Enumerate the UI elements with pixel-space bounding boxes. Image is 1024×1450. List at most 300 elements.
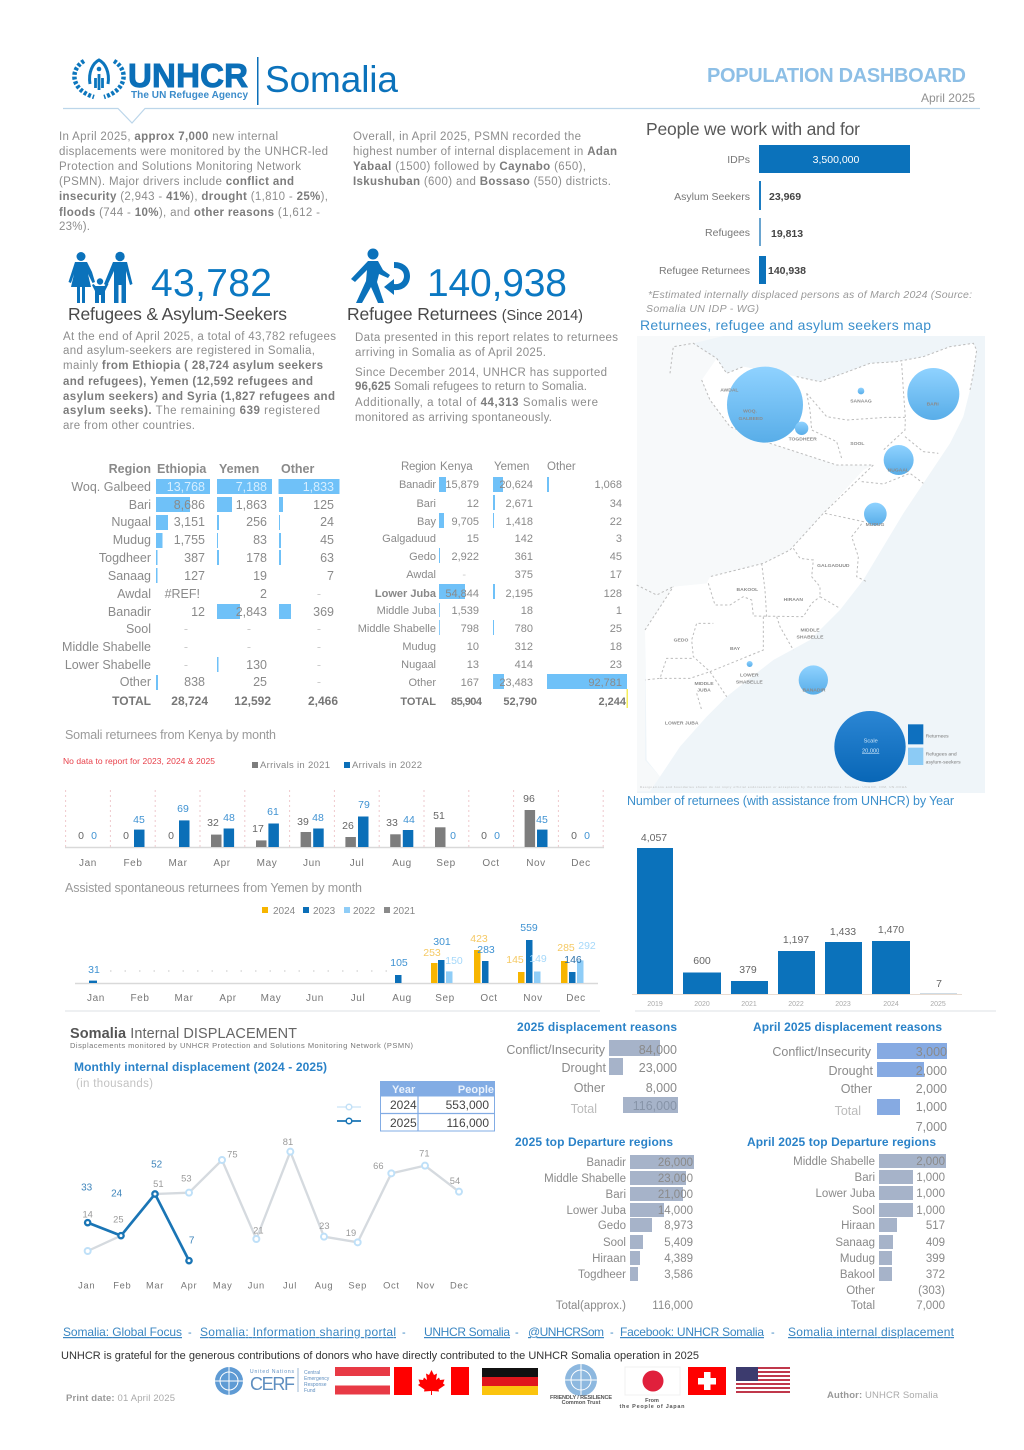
region labels: Mudug xyxy=(113,533,151,547)
labels and values: Total xyxy=(851,1300,875,1312)
month axis: Jan xyxy=(79,858,97,869)
map legend: Returnees xyxy=(926,733,949,739)
value labels: 0 xyxy=(494,830,500,842)
Kenya values: 9,705 xyxy=(451,516,479,528)
region labels: Banadir xyxy=(108,605,151,619)
region labels: HIRAAN xyxy=(784,597,803,603)
2024 value labels: 75 xyxy=(227,1150,238,1160)
other values: 45 xyxy=(320,533,334,547)
other values: 25 xyxy=(610,623,622,635)
labels and values: Middle Shabelle xyxy=(544,1173,626,1185)
panel: 2025 displacement reasons xyxy=(506,1020,678,1116)
value labels xyxy=(78,793,590,842)
Ethiopia values: 28,724 xyxy=(171,694,208,708)
section divider xyxy=(65,1010,996,1012)
labels and values: Other xyxy=(846,1285,875,1297)
Yemen values: 780 xyxy=(515,623,533,635)
Yemen values: 2,843 xyxy=(236,605,267,619)
value labels: 26 xyxy=(342,820,354,832)
Kenya values: 1,539 xyxy=(451,605,479,617)
Yemen values: 23,483 xyxy=(499,677,533,689)
year axis: 2025 xyxy=(930,1001,946,1008)
month axis: Sep xyxy=(436,858,456,869)
line chart: monthly internal displacement xyxy=(78,1137,469,1290)
Yemen values: 52,790 xyxy=(503,696,537,708)
table header xyxy=(401,461,576,473)
other values xyxy=(588,479,627,708)
labels and values: Lower Juba xyxy=(816,1188,876,1200)
year axis: 2022 xyxy=(788,1001,804,1008)
bar: asylum seekers: Asylum Seekers xyxy=(674,191,750,203)
table header: Other xyxy=(281,462,314,476)
month axis xyxy=(87,993,586,1004)
month axis: Jan xyxy=(87,993,105,1004)
month axis: Nov xyxy=(416,1280,435,1290)
Kenya values xyxy=(445,479,483,708)
month axis: Mar xyxy=(146,1280,164,1290)
value labels: 32 xyxy=(207,817,219,829)
Ethiopia values: 838 xyxy=(184,675,205,689)
icon: CERF logo: Emergency xyxy=(304,1376,330,1382)
region labels: WOQ. xyxy=(743,409,758,415)
section heading: Somalia internal displacement: Displacements monitored by UNHCR Protection and Solutions Monitoring Network (PSMN) xyxy=(70,1041,414,1050)
month axis: Jul xyxy=(283,1280,297,1290)
value labels xyxy=(641,832,942,990)
value labels: 39 xyxy=(297,816,309,828)
region labels: Nugaal xyxy=(111,515,151,529)
Yemen values: 178 xyxy=(246,551,267,565)
value labels: 150 xyxy=(445,955,463,967)
flag: Japan xyxy=(620,1367,685,1410)
footer links xyxy=(63,1325,955,1339)
other values: 17 xyxy=(610,569,622,581)
labels and values: 23,000 xyxy=(658,1173,693,1185)
region labels: Woq. Galbeed xyxy=(71,480,151,494)
chart title: Number of returnees (with assistance from UNHCR) by Year xyxy=(627,794,954,808)
month axis: Nov xyxy=(526,858,546,869)
region labels xyxy=(62,480,151,708)
text block: highest displacement districts xyxy=(353,131,617,188)
footer links: Somalia internal displacement xyxy=(788,1325,955,1339)
text block: returnees description: 96,625 Somali refugees to return to Somalia. xyxy=(355,381,587,393)
value labels xyxy=(88,922,596,976)
value labels: 45 xyxy=(536,814,548,826)
Ethiopia values: 127 xyxy=(184,569,205,583)
value labels: 31 xyxy=(88,964,100,976)
month axis: Mar xyxy=(174,993,194,1004)
value labels: 4,057 xyxy=(641,832,667,844)
value labels: 559 xyxy=(520,922,538,934)
labels and values: 1,000 xyxy=(916,1100,947,1114)
other values: 1,833 xyxy=(303,480,334,494)
month axis: Jul xyxy=(350,858,364,869)
region labels: Gedo xyxy=(409,551,436,563)
2024 value labels: 14 xyxy=(82,1209,93,1219)
2025 value labels: 33 xyxy=(81,1183,93,1194)
heading: refugees and asylum-seekers: Refugees & Asylum-Seekers xyxy=(68,304,287,324)
legend: Arrivals in 2022 xyxy=(352,760,422,771)
2025 line xyxy=(85,1191,192,1263)
text block: highest displacement districts: highest number of internal displacement in Adan xyxy=(353,146,617,158)
region labels: Middle Juba xyxy=(377,605,437,617)
year axis: 2023 xyxy=(835,1001,851,1008)
table: yearly totals: 553,000 xyxy=(446,1098,489,1112)
value labels: 0 xyxy=(571,830,577,842)
other values: - xyxy=(317,587,321,601)
labels and values: Total xyxy=(835,1104,861,1118)
icon: CERF logo: Fund xyxy=(304,1388,316,1394)
month axis: Dec xyxy=(566,993,586,1004)
table bars xyxy=(439,477,627,689)
icon: UN fund emblem: FRIENDLY / RESILIENCE xyxy=(550,1395,612,1401)
region labels: GALBEED xyxy=(738,416,763,422)
legend: 2024 xyxy=(273,906,296,917)
labels and values xyxy=(772,1045,947,1134)
icon: walking returnee with return arrow xyxy=(351,248,410,303)
labels and values: Gedo xyxy=(598,1220,626,1232)
other values: - xyxy=(317,640,321,654)
footer links: - xyxy=(188,1327,192,1339)
2024 value labels xyxy=(82,1137,460,1238)
Yemen values: - xyxy=(247,622,251,636)
labels and values: 1,000 xyxy=(916,1205,945,1217)
region labels: NUGAAL xyxy=(888,468,909,474)
region labels: TOTAL xyxy=(400,696,436,708)
labels and values: 26,000 xyxy=(658,1157,693,1169)
region labels xyxy=(665,388,939,726)
table header: Yemen xyxy=(494,461,529,473)
month axis: Oct xyxy=(480,993,498,1004)
region labels: Banadir xyxy=(399,479,436,491)
2024 value labels: 21 xyxy=(253,1225,264,1235)
labels and values: 14,000 xyxy=(658,1205,693,1217)
value labels: 600 xyxy=(693,955,711,967)
footnote: Somalia UN IDP - WG) xyxy=(646,303,759,315)
labels and values: 372 xyxy=(926,1269,945,1281)
region labels: Bay xyxy=(417,516,436,528)
text block: highest displacement districts: Yabaal (1500) followed by Caynabo (650), xyxy=(353,161,586,173)
Ethiopia values: - xyxy=(184,640,188,654)
bar: IDPs xyxy=(727,145,910,173)
region labels: LOWER JUBA xyxy=(665,720,699,726)
bars xyxy=(630,1155,694,1281)
value labels: 285 xyxy=(557,942,575,954)
region labels: JUBA xyxy=(697,688,711,694)
region labels: TOTAL xyxy=(112,694,151,708)
section heading: Somalia internal displacement: Somalia Internal DISPLACEMENT xyxy=(70,1026,297,1042)
bars xyxy=(431,950,568,983)
labels and values: Total(approx.) xyxy=(556,1300,626,1312)
2024 value labels: 66 xyxy=(373,1161,384,1171)
2025 value labels xyxy=(81,1159,195,1246)
region labels: BAY xyxy=(730,646,741,652)
value labels: 301 xyxy=(433,936,451,948)
month axis: Jun xyxy=(303,858,321,869)
print date: Print date: 01 April 2025 xyxy=(66,1393,175,1404)
bar: IDPs: IDPs xyxy=(727,154,750,166)
scale circle: 20,000 xyxy=(862,748,879,754)
text block: returnees description xyxy=(355,332,618,424)
footer links: Somalia: Information sharing portal xyxy=(200,1325,396,1339)
2024 value labels: 71 xyxy=(419,1149,430,1159)
month axis: Jun xyxy=(306,993,324,1004)
month axis: Feb xyxy=(113,1280,131,1290)
region labels: Galgaduud xyxy=(382,533,436,545)
footnote: *Estimated internally displaced persons as of March 2024 (Source: xyxy=(648,289,972,301)
Yemen values: 361 xyxy=(515,551,533,563)
country name: Somalia xyxy=(265,59,398,100)
month axis: Mar xyxy=(168,858,188,869)
value labels: 69 xyxy=(177,803,189,815)
Yemen values: 130 xyxy=(246,658,267,672)
Kenya values: 167 xyxy=(461,677,479,689)
panel: people we work with and for xyxy=(646,119,972,315)
labels and values: Sanaag xyxy=(835,1237,875,1249)
panel: 2025 top departure regions xyxy=(515,1135,694,1312)
legend xyxy=(262,906,416,917)
Yemen values: 2,195 xyxy=(505,588,533,600)
footer links: - xyxy=(402,1327,406,1339)
gridlines xyxy=(66,790,603,847)
labels and values: Bari xyxy=(606,1189,626,1201)
Ethiopia values: 13,768 xyxy=(167,480,205,494)
text block: refugees description: mainly from Ethiopia ( 28,724 asylum seekers xyxy=(63,360,323,372)
Yemen values: 7,188 xyxy=(236,480,267,494)
footer links: @UNHCRSom xyxy=(528,1325,604,1339)
icon: CERF logo: Response xyxy=(304,1382,327,1388)
text block: returnees description: arriving in Somalia as of April 2025. xyxy=(355,347,546,359)
value labels: 1,433 xyxy=(830,926,856,938)
region labels: SOOL xyxy=(850,441,864,447)
Kenya values: 15 xyxy=(467,533,479,545)
value labels: 44 xyxy=(403,814,415,826)
text block: displacement summary: insecurity (2,943 - 41%), drought (1,810 - 25%), xyxy=(59,191,328,203)
month axis: Sep xyxy=(435,993,455,1004)
value labels: 145 xyxy=(506,954,524,966)
month axis: Jun xyxy=(248,1280,265,1290)
value labels: 0 xyxy=(450,830,456,842)
heading: 2025 displacement reasons xyxy=(517,1020,677,1034)
Somalia land and regional borders xyxy=(637,336,977,791)
labels and values: Drought xyxy=(829,1064,874,1078)
Yemen values: 375 xyxy=(515,569,533,581)
line chart legend xyxy=(337,1104,361,1124)
year axis: 2019 xyxy=(647,1001,663,1008)
labels and values: Middle Shabelle xyxy=(793,1156,875,1168)
header rule with pointer xyxy=(63,108,980,123)
legend xyxy=(252,760,422,771)
Kenya values: 13 xyxy=(467,659,479,671)
labels and values: Total xyxy=(571,1102,597,1116)
bars xyxy=(637,848,957,994)
panel: April 2025 top departure regions xyxy=(747,1135,946,1312)
value labels: 423 xyxy=(470,933,488,945)
map legend: asylum-seekers xyxy=(926,759,961,765)
text block: displacement summary: displacements were monitored by the UNHCR-led xyxy=(59,146,328,158)
labels and values xyxy=(793,1156,945,1312)
heading: 2025 top Departure regions xyxy=(515,1135,673,1149)
table header: Region xyxy=(401,461,436,473)
refugee and returnee circles xyxy=(727,367,959,695)
Yemen values: 19 xyxy=(253,569,267,583)
bar: asylum seekers: 23,969 xyxy=(769,191,801,203)
other values: 369 xyxy=(313,605,334,619)
labels and values: 3,586 xyxy=(664,1269,693,1281)
region labels: MIDDLE xyxy=(694,681,714,687)
bars xyxy=(609,1040,678,1113)
month axis: Aug xyxy=(315,1280,333,1290)
table header: Other xyxy=(547,461,576,473)
Yemen values xyxy=(234,480,271,708)
labels and values: Mudug xyxy=(840,1253,875,1265)
labels and values: 7,000 xyxy=(916,1300,945,1312)
other values: 63 xyxy=(320,551,334,565)
month axis: Feb xyxy=(123,858,143,869)
Ethiopia values: 387 xyxy=(184,551,205,565)
region labels: BARI xyxy=(927,402,939,408)
region labels: Middle Shabelle xyxy=(358,623,436,635)
month axis xyxy=(79,858,591,869)
Ethiopia values: #REF! xyxy=(165,587,200,601)
other values: 3 xyxy=(616,533,622,545)
month axis: May xyxy=(261,993,281,1004)
footer links: Somalia: Global Focus xyxy=(63,1325,182,1339)
text block: refugees description: At the end of April 2025, a total of 43,782 refugees xyxy=(63,331,336,343)
other values: 125 xyxy=(313,498,334,512)
table header: Ethiopia xyxy=(157,462,207,476)
other values: 1 xyxy=(616,605,622,617)
month axis: Jan xyxy=(78,1280,95,1290)
text block: displacement summary xyxy=(59,131,328,233)
Kenya values: 2,922 xyxy=(451,551,479,563)
month axis: May xyxy=(213,1280,232,1290)
month axis: Jul xyxy=(351,993,365,1004)
labels and values xyxy=(506,1043,677,1116)
text block: returnees description: Since December 2014, UNHCR has supported xyxy=(355,367,607,379)
labels and values: Conflict/Insecurity xyxy=(772,1045,872,1059)
Kenya values: - xyxy=(462,569,466,581)
text block: highest displacement districts: Overall, in April 2025, PSMN recorded the xyxy=(353,131,581,143)
other values: 45 xyxy=(610,551,622,563)
region labels: Sanaag xyxy=(108,569,151,583)
Yemen values: 20,624 xyxy=(499,479,533,491)
legend: 2022 xyxy=(353,906,376,917)
text block: displacement summary: Protection and Solutions Monitoring Network xyxy=(59,161,301,173)
Yemen values: 12,592 xyxy=(234,694,271,708)
footer links: - xyxy=(515,1327,519,1339)
footnote xyxy=(646,289,972,315)
region labels: Nugaal xyxy=(401,659,436,671)
other values: 128 xyxy=(604,588,622,600)
labels and values: 4,389 xyxy=(664,1253,693,1265)
text block: refugees description xyxy=(63,331,336,432)
flag: USA xyxy=(736,1367,790,1393)
labels and values: Lower Juba xyxy=(567,1205,627,1217)
table header xyxy=(109,462,314,476)
other values: - xyxy=(317,675,321,689)
region labels: Sool xyxy=(126,622,151,636)
labels and values: Other xyxy=(574,1081,605,1095)
value labels: 48 xyxy=(312,812,324,824)
section heading: Somalia internal displacement xyxy=(70,1026,414,1050)
bar: refugee returnees: 140,938 xyxy=(768,265,806,277)
labels and values: 3,000 xyxy=(916,1045,947,1059)
text block: displacement summary: In April 2025, approx 7,000 new internal xyxy=(59,131,278,143)
text block: refugees description: and asylum-seekers are registered in Somalia, xyxy=(63,345,315,357)
2024 value labels: 81 xyxy=(283,1137,293,1147)
region labels: TOGDHEER xyxy=(789,437,817,443)
month axis: Aug xyxy=(392,993,412,1004)
region labels: Awdal xyxy=(117,587,151,601)
region labels: Bari xyxy=(416,498,436,510)
scale circle: Scale xyxy=(864,739,878,745)
labels and values: 517 xyxy=(926,1220,945,1232)
text block: refugees description: are from other countries. xyxy=(63,420,195,432)
bar: refugees: Refugees xyxy=(705,227,750,239)
icon: UN fund emblem xyxy=(550,1364,612,1406)
flag: Japan: the People of Japan xyxy=(620,1404,685,1410)
2024 value labels: 53 xyxy=(181,1174,192,1184)
region labels: Lower Juba xyxy=(375,588,437,600)
big number: refugees and asylum-seekers: 43,782 xyxy=(151,262,272,305)
labels and values: 2,000 xyxy=(916,1156,945,1168)
labels and values: Togdheer xyxy=(578,1269,626,1281)
bars xyxy=(877,1043,947,1115)
region labels: GALGADUUD xyxy=(817,563,850,569)
Yemen values: 1,863 xyxy=(236,498,267,512)
month axis: Oct xyxy=(482,858,500,869)
dashboard title xyxy=(707,65,975,105)
region labels: MIDDLE xyxy=(800,628,820,634)
text block: highest displacement districts: Iskushuban (600) and Bossaso (550) districts. xyxy=(353,176,611,188)
table bars xyxy=(156,479,340,690)
chart title: Assisted spontaneous returnees from Yemen by month xyxy=(65,881,362,895)
month axis: Nov xyxy=(523,993,543,1004)
value labels: 7 xyxy=(936,978,942,990)
2025 value labels: 52 xyxy=(151,1159,163,1170)
Yemen values: 312 xyxy=(515,641,533,653)
month axis xyxy=(78,1280,469,1290)
month axis: Aug xyxy=(392,858,412,869)
table: refugees and asylum seekers by region xyxy=(62,462,340,708)
value labels: 0 xyxy=(584,830,590,842)
region labels: AWDAL xyxy=(720,388,738,394)
value labels: 0 xyxy=(91,830,97,842)
Yemen values xyxy=(499,479,537,708)
labels and values: Sool xyxy=(852,1205,875,1217)
labels and values: 409 xyxy=(926,1237,945,1249)
table: yearly totals: 2024 xyxy=(390,1098,417,1112)
Ethiopia values: 3,151 xyxy=(174,515,205,529)
region labels: Other xyxy=(120,675,151,689)
value labels: 1,470 xyxy=(878,924,904,936)
region labels: Other xyxy=(408,677,436,689)
region labels: Lower Shabelle xyxy=(65,658,151,672)
year axis: 2020 xyxy=(694,1001,710,1008)
footer links: - xyxy=(610,1327,614,1339)
icon: CERF logo: Central xyxy=(304,1370,320,1376)
region labels: GEDO xyxy=(674,638,688,644)
other values: 92,781 xyxy=(588,677,622,689)
month axis: May xyxy=(257,858,277,869)
Kenya values: 15,879 xyxy=(445,479,479,491)
2024 line xyxy=(85,1149,462,1254)
footer links: - xyxy=(771,1327,775,1339)
month axis: Sep xyxy=(348,1280,367,1290)
icon: refugee family xyxy=(68,252,132,303)
labels and values: Conflict/Insecurity xyxy=(506,1043,606,1057)
month axis: Apr xyxy=(181,1280,197,1290)
